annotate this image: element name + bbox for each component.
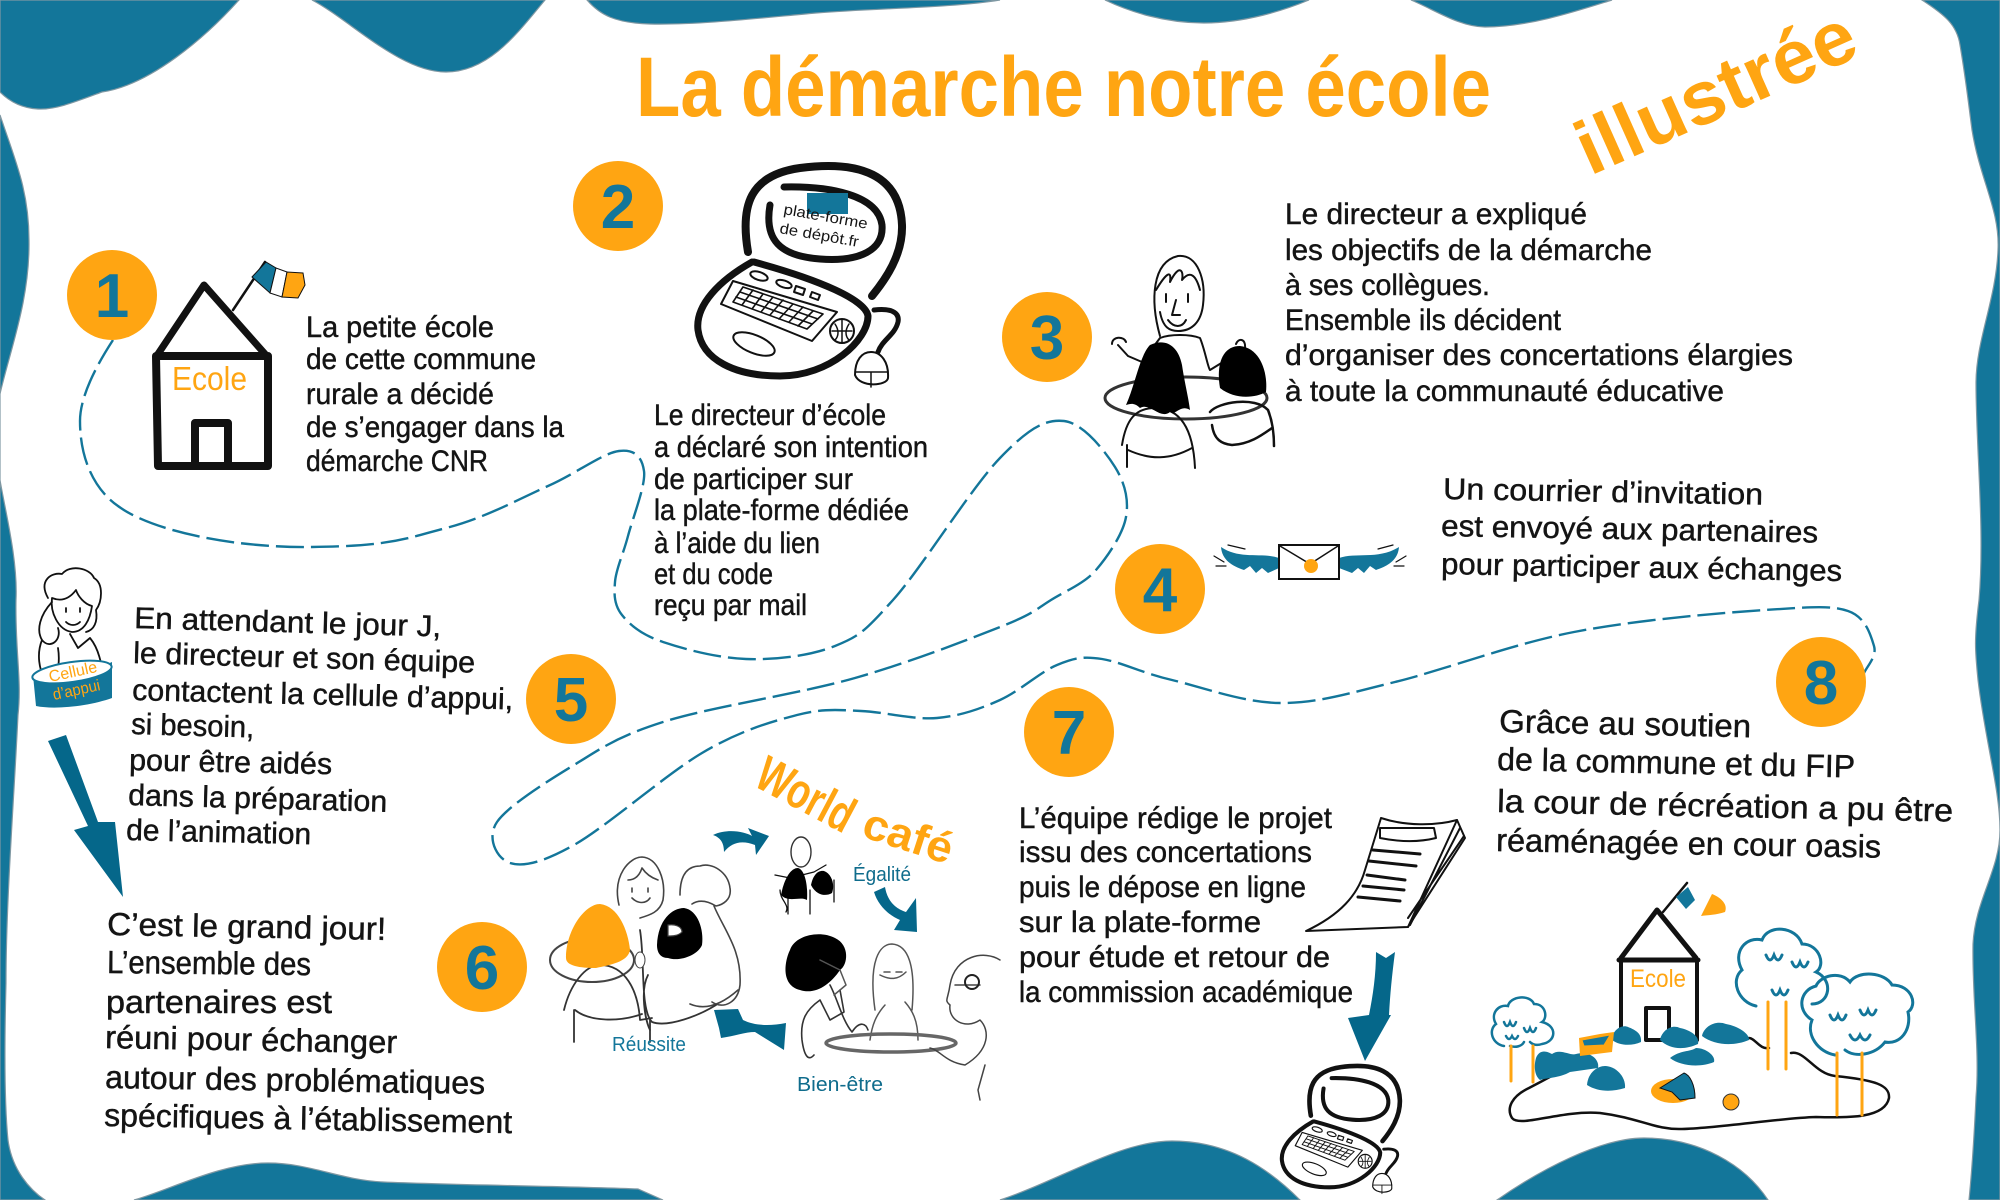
text: step 7 [1019,802,1353,1009]
icon: support cell operator on the phone: d’appui [51,677,102,704]
text: step 6: L’ensemble des [107,944,311,982]
text: step 8 [1496,703,1954,865]
illustration: oasis schoolyard: Ecole [1630,965,1686,993]
number badge 8: 8 [1804,649,1838,718]
label: Réussite: Réussite [612,1034,686,1056]
title: La démarche notre école [636,40,1491,134]
text: step 1: de s’engager dans la [306,411,564,444]
illustration: mini group [775,837,834,914]
step 3 panel [1002,198,1793,468]
step 4 panel [1115,473,1842,634]
text: step 5 [126,602,514,851]
text: step 7: la commission académique [1019,976,1353,1009]
text: step 4: pour participer aux échanges [1441,548,1842,588]
text: step 7: L’équipe rédige le projet [1019,802,1333,835]
heading: World café [747,745,960,874]
number badge 8 [1776,637,1866,727]
text: step 4: est envoyé aux partenaires [1441,510,1818,550]
text: step 6: spécifiques à l’établissement [104,1097,513,1140]
text: step 8: Grâce au soutien [1499,703,1752,744]
arrow: to Égalité [713,828,769,855]
icon: support cell operator on the phone: Cellule [47,659,99,686]
text: step 2: de participer sur [654,463,853,496]
text: step 8: la cour de récréation a pu être [1497,783,1954,829]
number badge 4: 4 [1143,556,1178,625]
text: step 2: Le directeur d’école [654,399,886,432]
text: step 1: La petite école [306,311,494,344]
text: step 1 [306,311,564,478]
text: step 5: le directeur et son équipe [133,637,476,680]
icon: director speaking to two colleagues [1105,256,1274,468]
text: step 7: pour étude et retour de [1019,941,1330,974]
text: step 2 [654,399,928,622]
text: step 5: En attendant le jour J, [134,602,442,644]
text: step 3: à toute la communauté éducative [1285,375,1724,408]
icon: school with flag: Ecole [172,360,247,397]
text: step 4: Un courrier d’invitation [1443,473,1763,512]
step 5 panel [31,568,616,851]
text: step 5: contactent la cellule d’appui, [132,674,514,716]
number badge 6 [437,922,527,1012]
heading: World café: café [857,799,960,874]
text: step 5: de l’animation [126,814,312,851]
number badge 3: 3 [1030,304,1064,373]
arrow: to Bien-être [874,887,917,932]
illustration: right table group [786,934,1000,1100]
text: step 1: rurale a décidé [306,378,494,411]
number badge 2: 2 [601,173,635,242]
number badge 1 [67,250,157,340]
text: step 6: réuni pour échanger [105,1019,398,1060]
icon: support cell operator on the phone [31,568,113,708]
text: step 3: les objectifs de la démarche [1285,234,1652,267]
number badge 2 [573,161,663,251]
label: Égalité: Égalité [853,863,911,886]
number badge 3 [1002,292,1092,382]
text: step 3: Le directeur a expliqué [1285,198,1587,231]
number badge 6: 6 [465,934,499,1003]
icon: laptop with platform url [698,166,902,387]
step 8 panel [1492,637,1954,1129]
text: step 4 [1441,473,1842,588]
number badge 7: 7 [1052,699,1086,768]
text: step 3: à ses collègues. [1285,269,1490,302]
text: step 2: la plate-forme dédiée [654,494,909,527]
icon: project document [1306,818,1465,931]
text: step 7: sur la plate-forme [1019,906,1261,939]
text: step 5: dans la préparation [128,779,388,819]
icon: laptop with platform url: plate-forme [782,201,869,233]
text: step 3: d’organiser des concertations élargies [1285,339,1793,372]
number badge 5 [526,654,616,744]
text: step 6: partenaires est [106,984,332,1020]
number badge 4 [1115,544,1205,634]
text: step 6: C’est le grand jour! [107,906,386,947]
text: step 2: a déclaré son intention [654,431,928,464]
text: step 1: de cette commune [306,343,536,376]
text: step 7: issu des concertations [1019,836,1312,869]
text: step 6 [104,906,513,1140]
text: step 6: autour des problématiques [105,1059,485,1101]
label: Bien-être: Bien-être [797,1074,883,1096]
icon: school with flag [156,262,305,466]
text: step 5: si besoin, [131,708,255,744]
arrow: down to laptop [1348,952,1395,1061]
illustration: oasis schoolyard [1492,883,1913,1129]
text: step 1: démarche CNR [306,445,488,478]
step 2 panel [573,161,928,622]
step 1 panel [67,250,564,478]
icon: winged envelope [1214,545,1406,579]
heading: World café: World [747,745,865,844]
text: step 8: réaménagée en cour oasis [1496,822,1881,865]
text: step 2: et du code [654,558,773,591]
text: step 7: puis le dépose en ligne [1019,871,1306,904]
subtitle: illustrée: illustrée [1562,0,1869,192]
text: step 8: de la commune et du FIP [1497,741,1856,784]
illustration: left table group [550,857,740,1042]
text: step 5: pour être aidés [129,744,332,781]
text: step 2: reçu par mail [654,589,807,622]
arrow: step 5 to step 6 [48,735,123,897]
text: step 3 [1285,198,1793,408]
text: step 2: à l’aide du lien [654,527,820,560]
number badge 5: 5 [554,666,588,735]
step 6 panel [104,745,1000,1140]
arrow: back to Réussite [714,1009,786,1050]
number badge 7 [1024,687,1114,777]
icon: laptop with platform url: de dépôt.fr [778,220,860,251]
number badge 1: 1 [95,262,129,331]
text: step 3: Ensemble ils décident [1285,304,1562,337]
step 7 panel [1019,687,1465,1194]
icon: laptop small [1282,1066,1400,1194]
dashed route connecting the steps [80,340,1875,864]
